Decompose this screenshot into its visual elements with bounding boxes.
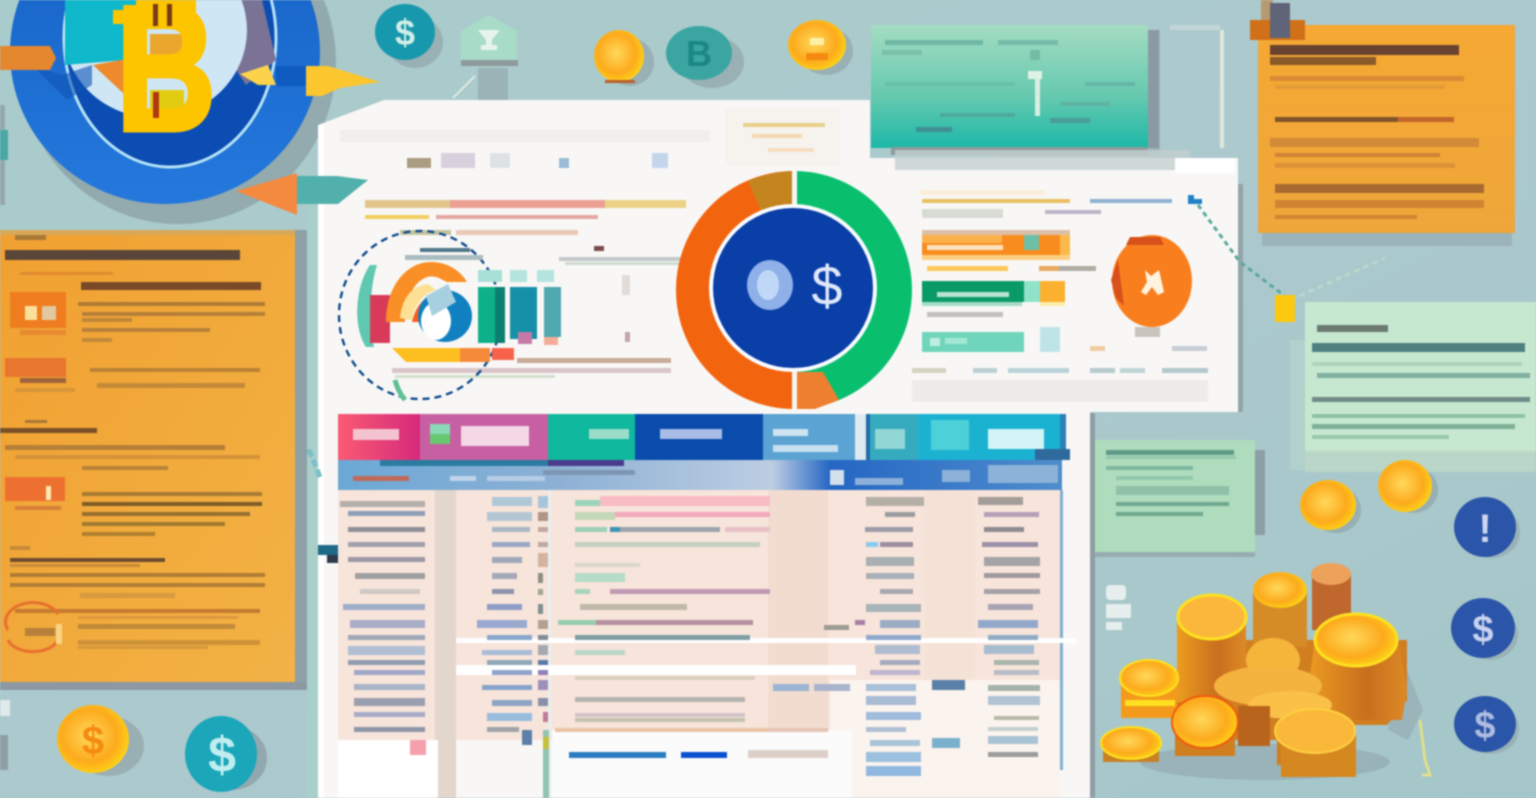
icon: pale green badge xyxy=(461,15,518,100)
coin stack left xyxy=(1120,660,1178,718)
table column 1 xyxy=(340,501,425,732)
section 2 xyxy=(0,358,262,536)
icon: teal dollar coin: $ xyxy=(395,12,415,53)
table subheader xyxy=(338,460,1062,490)
icon: gold coin right 1 xyxy=(1300,480,1361,533)
icon: blue coin 3: $ xyxy=(1474,705,1496,747)
table xyxy=(338,414,1076,798)
icon: outlined chip xyxy=(6,603,62,652)
arrow: orange left xyxy=(0,46,56,70)
icon: small white marks xyxy=(1106,585,1131,630)
panel: right green note xyxy=(1290,302,1536,472)
panel: right orange note xyxy=(1250,0,1515,246)
table header row xyxy=(338,414,1070,479)
table text column xyxy=(555,496,828,732)
icon: coin pile xyxy=(1101,563,1430,780)
icon: teal dollar coin xyxy=(375,4,443,68)
middle coin xyxy=(1246,638,1300,682)
icon: teal B coin: B xyxy=(686,33,712,74)
flat coins xyxy=(1214,666,1332,746)
icon: bottom teal coin: $ xyxy=(208,727,236,783)
coin stack front right xyxy=(1275,709,1356,777)
section 1 xyxy=(5,235,265,342)
bar stack xyxy=(1311,563,1351,630)
edge coin fragments xyxy=(0,105,10,770)
icon: pin xyxy=(1250,0,1305,40)
icon: gold coin top xyxy=(788,20,853,75)
icon: blue coin 2 xyxy=(1451,598,1518,660)
table narrow column xyxy=(538,496,549,798)
panel: left orange note xyxy=(0,230,307,690)
arrow: yellow right xyxy=(240,65,380,96)
coin front centre xyxy=(1172,696,1238,756)
table column 2 xyxy=(477,497,532,745)
chart: donut: $ xyxy=(811,254,843,317)
panel: small green note xyxy=(1095,440,1265,557)
icon: orange chip xyxy=(10,292,66,335)
icon: gold coin right 2 xyxy=(1378,460,1438,513)
table body background xyxy=(338,490,1076,798)
section 3 xyxy=(6,546,265,652)
table column 5 xyxy=(865,497,965,776)
stack right xyxy=(1307,614,1407,720)
coin flat left xyxy=(1101,727,1161,762)
icon: blue coin 1: ! xyxy=(1478,507,1492,551)
icon: blue coin 3 xyxy=(1454,696,1519,754)
chart: radial bars xyxy=(339,231,561,400)
icon: bottom gold coin: $ xyxy=(82,719,104,763)
icon: blue coin 2: $ xyxy=(1472,609,1494,651)
panel: main white document xyxy=(307,100,1243,798)
top toolbar xyxy=(340,130,710,168)
icon: bottom teal coin xyxy=(185,716,267,792)
table column 6 xyxy=(978,497,1040,757)
table lower segments xyxy=(410,620,865,758)
icon: orange hexagon badge xyxy=(1111,235,1192,337)
callout: top tag xyxy=(725,108,840,166)
icon: yellow tag xyxy=(1275,295,1295,322)
panel: teal note xyxy=(871,25,1224,157)
icon: gold coin xyxy=(594,30,654,86)
panel: right dashboard bars xyxy=(912,190,1208,402)
pile base xyxy=(1177,640,1407,765)
arrow: orange and teal xyxy=(236,173,368,215)
tall stack left xyxy=(1177,595,1246,702)
stack back xyxy=(1253,572,1307,647)
icon: red chip xyxy=(5,477,65,510)
chart: donut xyxy=(676,170,912,410)
icon: teal B coin xyxy=(666,26,744,88)
text lines xyxy=(365,200,686,378)
icon: blue coin 1 xyxy=(1454,497,1520,558)
icon: bitcoin target xyxy=(0,0,380,224)
icon: bottom gold coin xyxy=(57,705,144,776)
connector lines xyxy=(285,76,1385,563)
